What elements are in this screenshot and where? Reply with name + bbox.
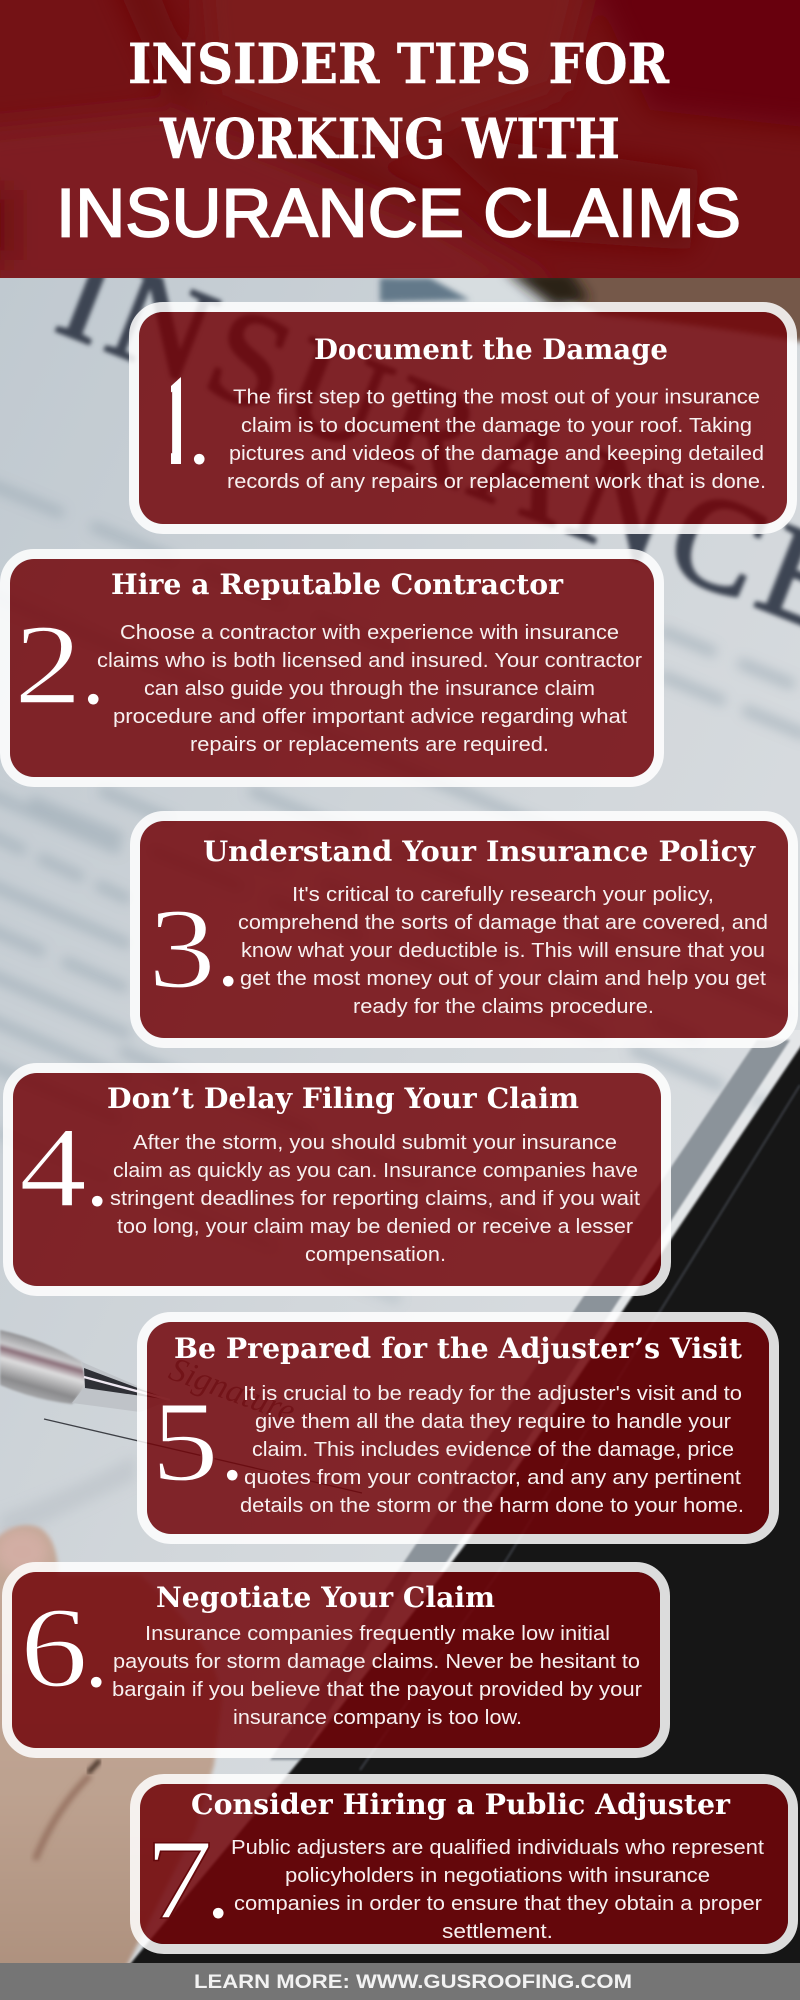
body text: tip 7: Public adjusters are qualified individuals who represent xyxy=(231,1836,764,1859)
number 4: 4 xyxy=(19,1104,87,1231)
body text: tip 7: settlement. xyxy=(442,1920,553,1943)
number 7: 7 xyxy=(145,1816,213,1943)
body text: tip 1: pictures and videos of the damage and keeping detailed xyxy=(229,442,764,465)
number 7 xyxy=(145,1816,230,1943)
number 2 xyxy=(14,601,104,728)
body text: tip 7: companies in order to ensure that they obtain a proper xyxy=(234,1892,762,1915)
number 5 xyxy=(151,1378,244,1505)
body text: tip 7: policyholders in negotiations with insurance xyxy=(285,1864,710,1887)
heading: Be Prepared for the Adjuster's Visit: Be Prepared for the Adjuster’s Visit xyxy=(174,1332,742,1365)
panel: tip 4 don't delay filing your claim xyxy=(8,1068,666,1291)
heading: Hire a Reputable Contractor: Hire a Reputable Contractor xyxy=(111,568,564,601)
body text: tip 7 xyxy=(231,1836,764,1943)
body text: tip 2: procedure and offer important advice regarding what xyxy=(113,705,627,728)
number 4 xyxy=(19,1104,108,1231)
body text: tip 1: claim is to document the damage to your roof. Taking xyxy=(241,414,752,437)
number 2: 2 xyxy=(14,601,82,728)
body text: tip 1: records of any repairs or replacement work that is done. xyxy=(227,470,766,493)
body text: tip 4: After the storm, you should submit your insurance xyxy=(133,1131,617,1154)
number 6: . xyxy=(85,1607,108,1706)
title: INSURANCE CLAIMS xyxy=(56,174,741,252)
title xyxy=(56,31,741,252)
body text: tip 2: can also guide you through the insurance claim xyxy=(144,677,595,700)
body text: tip 5: details on the storm or the harm done to your home. xyxy=(240,1494,744,1517)
body text: tip 4: too long, your claim may be denied or receive a lesser xyxy=(117,1215,633,1238)
body text: tip 4 xyxy=(110,1131,640,1266)
heading: Don't Delay Filing Your Claim: Don’t Delay Filing Your Claim xyxy=(107,1082,579,1115)
body text: tip 3: ready for the claims procedure. xyxy=(353,995,654,1018)
panel: tip 1 document the damage xyxy=(134,307,792,529)
body text: tip 4: stringent deadlines for reporting claims, and if you wait xyxy=(110,1187,640,1210)
body text: tip 4: claim as quickly as you can. Insurance companies have xyxy=(113,1159,638,1182)
body text: tip 3: know what your deductible is. This will ensure that you xyxy=(241,939,765,962)
number 5: 5 xyxy=(151,1378,219,1505)
panel: tip 5 be prepared for the adjuster's visit xyxy=(142,1317,774,1539)
number 4: . xyxy=(86,1126,108,1225)
body text: tip 3: comprehend the sorts of damage that are covered, and xyxy=(238,911,768,934)
panel: tip 2 hire a reputable contractor xyxy=(5,554,659,782)
panel: tip 7 consider hiring a public adjuster xyxy=(135,1779,793,1949)
footer bar xyxy=(0,1963,800,2000)
body text: tip 1: The first step to getting the most out of your insurance xyxy=(233,386,760,408)
body text: tip 4: compensation. xyxy=(305,1243,446,1266)
header band xyxy=(0,0,800,300)
number 6 xyxy=(20,1584,108,1711)
body text: tip 2: claims who is both licensed and insured. Your contractor xyxy=(97,649,642,672)
number 5: . xyxy=(221,1400,244,1499)
heading: Understand Your Insurance Policy: Understand Your Insurance Policy xyxy=(203,835,756,868)
title: INSIDER TIPS FOR xyxy=(128,31,670,96)
body text: tip 1 xyxy=(227,386,766,493)
body text: tip 5 xyxy=(240,1382,744,1517)
panel: tip 6 negotiate your claim xyxy=(7,1567,665,1753)
number 1 xyxy=(171,377,205,464)
title: WORKING WITH xyxy=(159,106,620,171)
number 7: . xyxy=(207,1838,230,1937)
body text: tip 2 xyxy=(97,621,642,756)
body text: tip 5: give them all the data they require to handle your xyxy=(255,1410,731,1433)
body text: tip 2: Choose a contractor with experience with insurance xyxy=(120,621,619,644)
number 3: 3 xyxy=(148,885,216,1012)
body text: tip 2: repairs or replacements are required. xyxy=(190,733,549,756)
body text: tip 5: claim. This includes evidence of the damage, price xyxy=(252,1438,734,1461)
number 1: . xyxy=(188,384,210,483)
footer text: LEARN MORE: WWW.GUSROOFING.COM xyxy=(194,1971,632,1993)
panel: tip 3 understand your insurance policy xyxy=(135,816,793,1043)
number 3 xyxy=(148,885,240,1012)
heading: Negotiate Your Claim: Negotiate Your Claim xyxy=(156,1581,495,1614)
body text: tip 3: It's critical to carefully research your policy, xyxy=(292,883,714,906)
heading: Consider Hiring a Public Adjuster: Consider Hiring a Public Adjuster xyxy=(191,1788,731,1821)
number 2: . xyxy=(82,624,104,723)
number 3: . xyxy=(217,906,240,1005)
number 1: 1 xyxy=(142,353,211,491)
body text: tip 6: Insurance companies frequently make low initial xyxy=(145,1622,610,1645)
body text: tip 5: It is crucial to be ready for the adjuster's visit and to xyxy=(243,1382,742,1405)
body text: tip 3 xyxy=(238,883,768,1018)
body text: tip 5: quotes from your contractor, and any any pertinent xyxy=(244,1466,741,1489)
body text: tip 6: insurance company is too low. xyxy=(233,1706,522,1729)
body text: tip 6: payouts for storm damage claims. Never be hesitant to xyxy=(113,1650,640,1673)
heading: Document the Damage: Document the Damage xyxy=(314,333,668,366)
body text: tip 3: get the most money out of your claim and help you get xyxy=(240,967,766,990)
number 6: 6 xyxy=(20,1584,88,1711)
body text: tip 6 xyxy=(112,1622,642,1729)
body text: tip 6: bargain if you believe that the payout provided by your xyxy=(112,1678,642,1701)
background photo: insurance document, pen and hand: Signature xyxy=(164,1351,300,1430)
